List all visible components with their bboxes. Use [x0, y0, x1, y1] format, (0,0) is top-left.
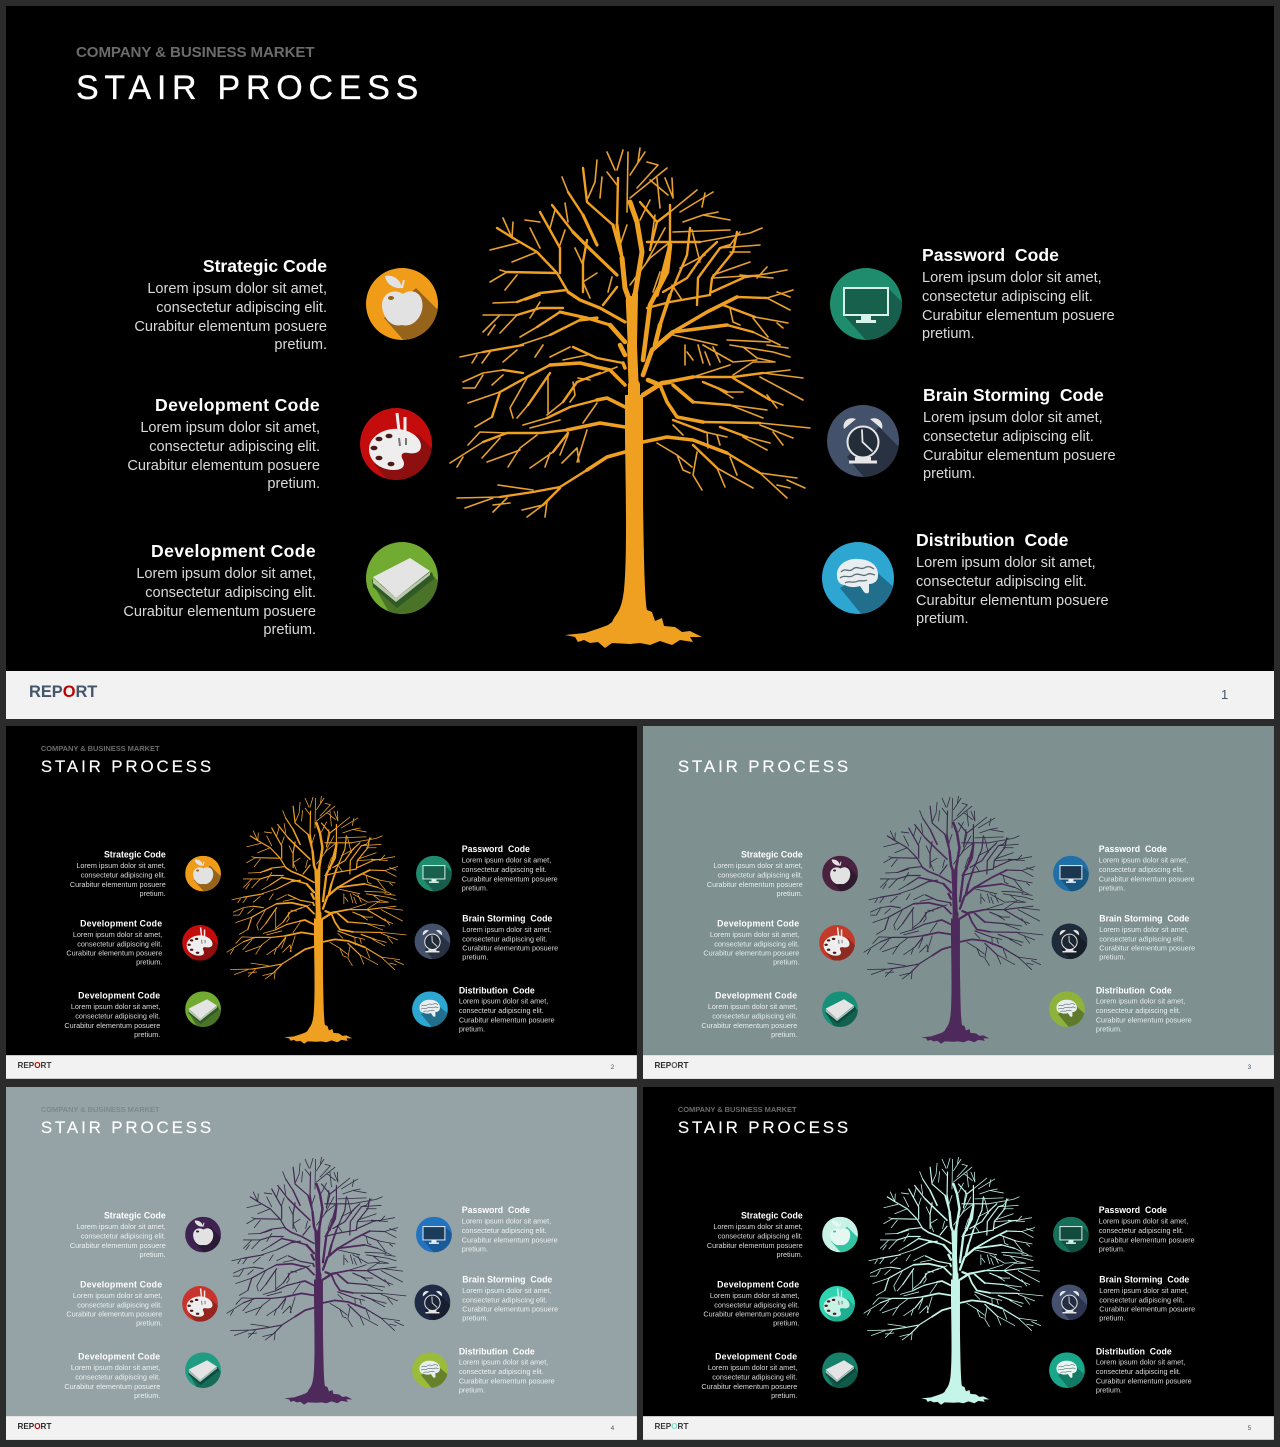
- text block: Development Code: Lorem ipsum dolor sit amet, consectetur adipiscing elit. Curabitur elementum posuere pretium.: [127, 420, 320, 492]
- icon: alarm clock: [827, 405, 899, 477]
- text block: Strategic Code: [46, 1210, 166, 1260]
- footer bar: REPORT: [17, 1422, 51, 1431]
- icon: apple: [822, 856, 858, 892]
- text block: Brain Storming Code: Brain Storming Code: [1099, 914, 1189, 924]
- text block: Development Code: Development Code: [80, 919, 162, 928]
- text block: Brain Storming Code: [1099, 1274, 1219, 1324]
- icon: apple: [185, 856, 221, 892]
- icon: palette: [819, 1286, 855, 1322]
- icon: brain: [822, 542, 894, 614]
- footer bar: REPORT: [17, 1061, 51, 1070]
- text block: Distribution Code: Lorem ipsum dolor sit amet, consectetur adipiscing elit. Curabitur elementum posuere pretium.: [459, 1359, 555, 1395]
- text block: Development Code second: Lorem ipsum dolor sit amet, consectetur adipiscing elit. Curabitur elementum posuere pretium.: [123, 566, 316, 638]
- subtitle: COMPANY & BUSINESS MARKET: [678, 1106, 796, 1114]
- text block: Distribution Code: [459, 1345, 578, 1395]
- panel: slide 4, gray with purple tree: [6, 1087, 637, 1440]
- text block: Brain Storming Code: Brain Storming Code: [1099, 1275, 1189, 1285]
- icon: alarm clock: [414, 924, 450, 959]
- icon: brain: [412, 1352, 448, 1388]
- text block: Strategic Code: Lorem ipsum dolor sit amet, consectetur adipiscing elit. Curabitur elementum posuere pretium.: [134, 281, 327, 353]
- title: STAIR PROCESS: [678, 1118, 851, 1137]
- text block: Development Code second: Development Code: [151, 541, 316, 561]
- text block: Development Code second: Development Code: [715, 1352, 797, 1362]
- text block: Distribution Code: Distribution Code: [459, 985, 535, 995]
- text block: Password Code: Lorem ipsum dolor sit amet, consectetur adipiscing elit. Curabitur elementum posuere pretium.: [1099, 857, 1195, 893]
- icon: monitor: [830, 268, 902, 340]
- text block: Distribution Code: Lorem ipsum dolor sit amet, consectetur adipiscing elit. Curabitur elementum posuere pretium.: [916, 555, 1109, 627]
- footer bar: 3: [1248, 1063, 1251, 1071]
- icon: book: [185, 1352, 221, 1388]
- text block: Development Code second: Lorem ipsum dolor sit amet, consectetur adipiscing elit. Curabitur elementum posuere pretium.: [701, 1364, 797, 1400]
- subtitle: COMPANY & BUSINESS MARKET: [41, 1106, 159, 1114]
- icon: book: [822, 992, 858, 1027]
- text block: Password Code: [1099, 1204, 1218, 1254]
- icon: brain: [1049, 992, 1085, 1027]
- subtitle: COMPANY & BUSINESS MARKET: [41, 745, 159, 753]
- text block: Password Code: Password Code: [1099, 1205, 1167, 1215]
- footer bar: 5: [1248, 1424, 1251, 1432]
- icon: apple: [366, 268, 438, 340]
- text block: Development Code: Lorem ipsum dolor sit amet, consectetur adipiscing elit. Curabitur elementum posuere pretium.: [66, 931, 162, 967]
- text block: Development Code: Lorem ipsum dolor sit amet, consectetur adipiscing elit. Curabitur elementum posuere pretium.: [703, 1292, 799, 1328]
- panel: slide 2, black with orange tree: [6, 726, 637, 1079]
- chart: purple bare tree: [864, 796, 1044, 1044]
- footer bar: 4: [611, 1424, 614, 1432]
- text block: Brain Storming Code: Brain Storming Code: [923, 385, 1104, 405]
- footer bar: [643, 1055, 1274, 1079]
- title: STAIR PROCESS: [76, 69, 424, 107]
- text block: Strategic Code: [683, 1210, 803, 1260]
- panel: main slide 1, black with orange tree: [6, 6, 1274, 719]
- text block: Strategic Code: Lorem ipsum dolor sit amet, consectetur adipiscing elit. Curabitur elementum posuere pretium.: [70, 862, 166, 898]
- icon: palette: [182, 1286, 218, 1322]
- text block: Password Code: Password Code: [462, 1205, 530, 1215]
- text block: Strategic Code: Strategic Code: [104, 1211, 166, 1221]
- text block: Distribution Code: [1096, 1345, 1215, 1395]
- text block: Password Code: Lorem ipsum dolor sit amet, consectetur adipiscing elit. Curabitur elementum posuere pretium.: [922, 270, 1115, 342]
- text block: Distribution Code: Lorem ipsum dolor sit amet, consectetur adipiscing elit. Curabitur elementum posuere pretium.: [1096, 1359, 1192, 1395]
- text block: Brain Storming Code: Lorem ipsum dolor sit amet, consectetur adipiscing elit. Curabitur elementum posuere pretium.: [462, 926, 558, 962]
- text block: Brain Storming Code: Lorem ipsum dolor sit amet, consectetur adipiscing elit. Curabitur elementum posuere pretium.: [1099, 1287, 1195, 1323]
- icon: book: [366, 542, 438, 614]
- text block: Development Code second: Development Code: [78, 991, 160, 1001]
- icon: monitor: [1053, 1217, 1089, 1252]
- text block: Development Code: Development Code: [717, 1280, 799, 1289]
- footer bar: [6, 671, 1274, 719]
- panel: slide 3, teal gray with purple tree: [643, 726, 1274, 1079]
- text block: Password Code: Lorem ipsum dolor sit amet, consectetur adipiscing elit. Curabitur elementum posuere pretium.: [462, 857, 558, 893]
- text block: Password Code: Password Code: [462, 844, 530, 854]
- text block: Password Code: [462, 1204, 581, 1254]
- icon: book: [185, 991, 221, 1027]
- icon: apple: [185, 1217, 221, 1252]
- text block: Brain Storming Code: Brain Storming Code: [462, 914, 552, 924]
- text block: Development Code second: Development Code: [78, 1352, 160, 1362]
- footer bar: REPORT: [654, 1061, 688, 1070]
- text block: Development Code: [43, 1279, 162, 1329]
- text block: Strategic Code: Strategic Code: [104, 850, 166, 860]
- text block: Strategic Code: Strategic Code: [741, 1211, 803, 1221]
- text block: Development Code: Development Code: [80, 1280, 162, 1289]
- text block: Distribution Code: Distribution Code: [459, 1346, 535, 1356]
- text block: Development Code second: Lorem ipsum dolor sit amet, consectetur adipiscing elit. Curabitur elementum posuere pretium.: [701, 1003, 797, 1039]
- text block: Distribution Code: Lorem ipsum dolor sit amet, consectetur adipiscing elit. Curabitur elementum posuere pretium.: [1096, 998, 1192, 1034]
- text block: Strategic Code: Strategic Code: [741, 850, 803, 860]
- text block: Development Code: Development Code: [155, 395, 320, 415]
- icon: monitor: [416, 1217, 452, 1252]
- footer bar: REPORT: [29, 683, 97, 701]
- subtitle: COMPANY & BUSINESS MARKET: [76, 44, 314, 61]
- icon: palette: [182, 925, 218, 961]
- text block: Password Code: Lorem ipsum dolor sit amet, consectetur adipiscing elit. Curabitur elementum posuere pretium.: [1099, 1218, 1195, 1254]
- text block: Development Code second: Development Code: [715, 991, 797, 1001]
- text block: Strategic Code: Lorem ipsum dolor sit amet, consectetur adipiscing elit. Curabitur elementum posuere pretium.: [707, 1223, 803, 1259]
- footer bar: [643, 1416, 1274, 1440]
- text block: Development Code second: [678, 1351, 797, 1401]
- text block: Password Code: Password Code: [922, 245, 1059, 265]
- footer bar: 2: [611, 1063, 614, 1071]
- icon: palette: [360, 408, 432, 480]
- text block: Development Code: Development Code: [717, 919, 799, 928]
- text block: Password Code: Password Code: [1099, 844, 1167, 854]
- text block: Distribution Code: Distribution Code: [1096, 985, 1172, 995]
- text block: Development Code: Lorem ipsum dolor sit amet, consectetur adipiscing elit. Curabitur elementum posuere pretium.: [66, 1292, 162, 1328]
- chart: orange bare tree: [226, 796, 406, 1044]
- text block: Development Code second: Lorem ipsum dolor sit amet, consectetur adipiscing elit. Curabitur elementum posuere pretium.: [64, 1364, 160, 1400]
- chart: purple bare tree: [226, 1156, 406, 1405]
- text block: Brain Storming Code: [462, 1274, 582, 1324]
- text block: Brain Storming Code: Brain Storming Code: [462, 1275, 552, 1285]
- text block: Development Code second: [41, 1351, 160, 1401]
- icon: monitor: [416, 856, 452, 892]
- footer bar: [6, 1416, 637, 1440]
- text block: Password Code: Lorem ipsum dolor sit amet, consectetur adipiscing elit. Curabitur elementum posuere pretium.: [462, 1218, 558, 1254]
- text block: Brain Storming Code: Lorem ipsum dolor sit amet, consectetur adipiscing elit. Curabitur elementum posuere pretium.: [462, 1287, 558, 1323]
- chart: mint bare tree: [859, 1153, 1048, 1411]
- text block: Brain Storming Code: Lorem ipsum dolor sit amet, consectetur adipiscing elit. Curabitur elementum posuere pretium.: [923, 410, 1116, 482]
- title: STAIR PROCESS: [41, 1118, 214, 1137]
- icon: brain: [412, 991, 448, 1027]
- text block: Development Code second: Lorem ipsum dolor sit amet, consectetur adipiscing elit. Curabitur elementum posuere pretium.: [64, 1003, 160, 1039]
- footer bar: 1: [1221, 687, 1228, 702]
- icon: brain: [1049, 1352, 1085, 1388]
- text block: Brain Storming Code: Lorem ipsum dolor sit amet, consectetur adipiscing elit. Curabitur elementum posuere pretium.: [1099, 926, 1195, 962]
- icon: alarm clock: [1052, 924, 1088, 960]
- text block: Distribution Code: Lorem ipsum dolor sit amet, consectetur adipiscing elit. Curabitur elementum posuere pretium.: [459, 998, 555, 1034]
- subtitle: COMPANY & BUSINESS MARKET: [678, 745, 796, 753]
- icon: alarm clock: [415, 1285, 450, 1320]
- text block: Strategic Code: Lorem ipsum dolor sit amet, consectetur adipiscing elit. Curabitur elementum posuere pretium.: [707, 862, 803, 898]
- title: STAIR PROCESS: [41, 757, 214, 776]
- icon: alarm clock: [1052, 1285, 1087, 1320]
- text block: Development Code: [680, 1279, 799, 1329]
- chart: orange bare tree: [449, 147, 811, 648]
- icon: book: [822, 1352, 858, 1388]
- text block: Development Code: Lorem ipsum dolor sit amet, consectetur adipiscing elit. Curabitur elementum posuere pretium.: [703, 931, 799, 967]
- icon: palette: [819, 925, 855, 961]
- title: STAIR PROCESS: [678, 757, 851, 776]
- icon: apple: [822, 1217, 858, 1252]
- text block: Strategic Code: Lorem ipsum dolor sit amet, consectetur adipiscing elit. Curabitur elementum posuere pretium.: [70, 1223, 166, 1259]
- icon: monitor: [1053, 856, 1089, 892]
- footer bar: [6, 1055, 637, 1079]
- footer bar: REPORT: [654, 1422, 688, 1431]
- text block: Distribution Code: Distribution Code: [1096, 1346, 1172, 1356]
- text block: Distribution Code: Distribution Code: [916, 530, 1068, 550]
- text block: Strategic Code: Strategic Code: [203, 256, 327, 276]
- panel: slide 5, black with mint tree: [643, 1087, 1274, 1440]
